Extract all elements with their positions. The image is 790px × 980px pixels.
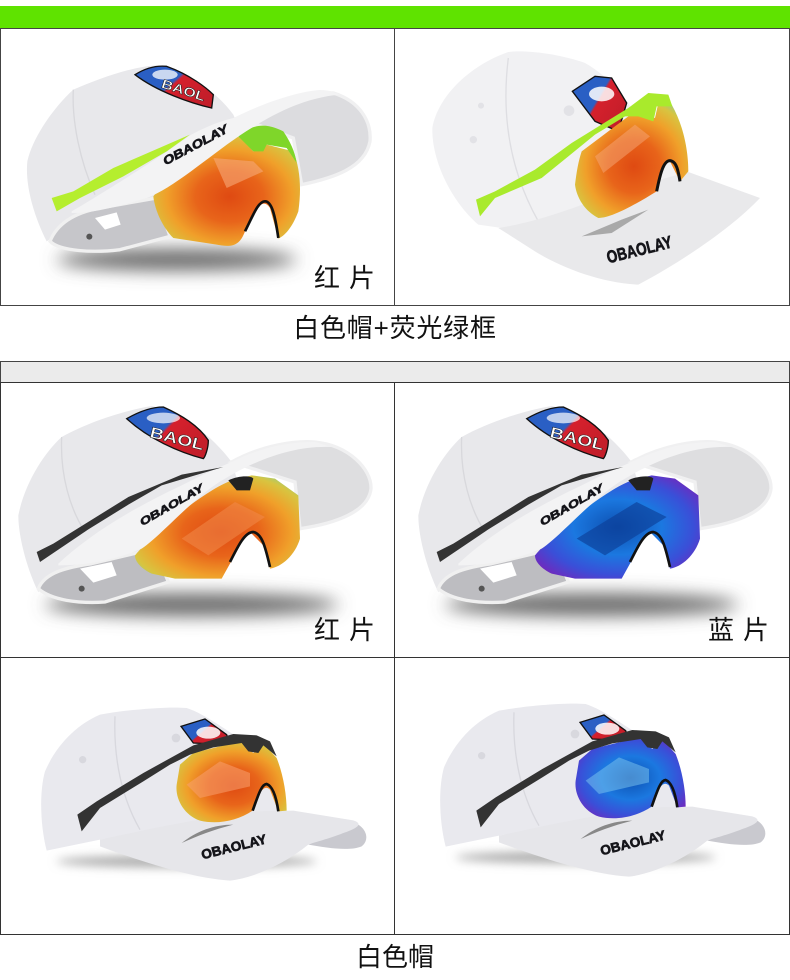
green header bar <box>0 6 790 28</box>
hat and glasses illustration: BAOL <box>148 424 206 454</box>
label: red lens: 红 <box>314 615 340 645</box>
label: red lens: 片 <box>349 615 375 645</box>
hat and glasses illustration: OBAOLAY <box>161 121 231 168</box>
hat and glasses illustration: OBAOLAY <box>138 482 207 529</box>
hat and glasses illustration <box>432 51 760 285</box>
hat and glasses illustration: OBAOLAY <box>599 828 667 858</box>
panel: white cap black frame red lens, side view <box>0 382 394 658</box>
label: blue lens: 蓝 <box>708 615 734 645</box>
label: red lens: 片 <box>349 263 375 293</box>
hat and glasses illustration <box>27 65 370 270</box>
hat and glasses illustration: BAOL <box>160 77 207 104</box>
hat and glasses illustration: OBAOLAY <box>604 232 674 267</box>
hat and glasses illustration: OBAOLAY <box>200 832 268 862</box>
panel: white cap black frame blue lens, side view <box>394 382 790 658</box>
label: red lens: 红 <box>314 263 340 293</box>
label: blue lens: 片 <box>743 615 769 645</box>
caption: white cap: 白色帽 <box>356 942 434 972</box>
gray section bar <box>0 362 790 382</box>
hat and glasses illustration <box>440 704 765 877</box>
panel: white cap neon green frame, front view <box>394 28 790 306</box>
panel: white cap black frame blue lens, front view <box>394 658 790 934</box>
hat and glasses illustration <box>18 406 371 616</box>
hat and glasses illustration <box>418 406 771 616</box>
hat and glasses illustration: OBAOLAY <box>538 482 607 529</box>
hat and glasses illustration <box>41 708 366 881</box>
caption: white cap with neon green frame: 白色帽+荧光绿框 <box>293 313 497 343</box>
panel: white cap black frame red lens, front view <box>0 658 394 934</box>
hat and glasses illustration: BAOL <box>548 424 606 454</box>
panel: white cap neon green frame, side view <box>0 28 394 306</box>
